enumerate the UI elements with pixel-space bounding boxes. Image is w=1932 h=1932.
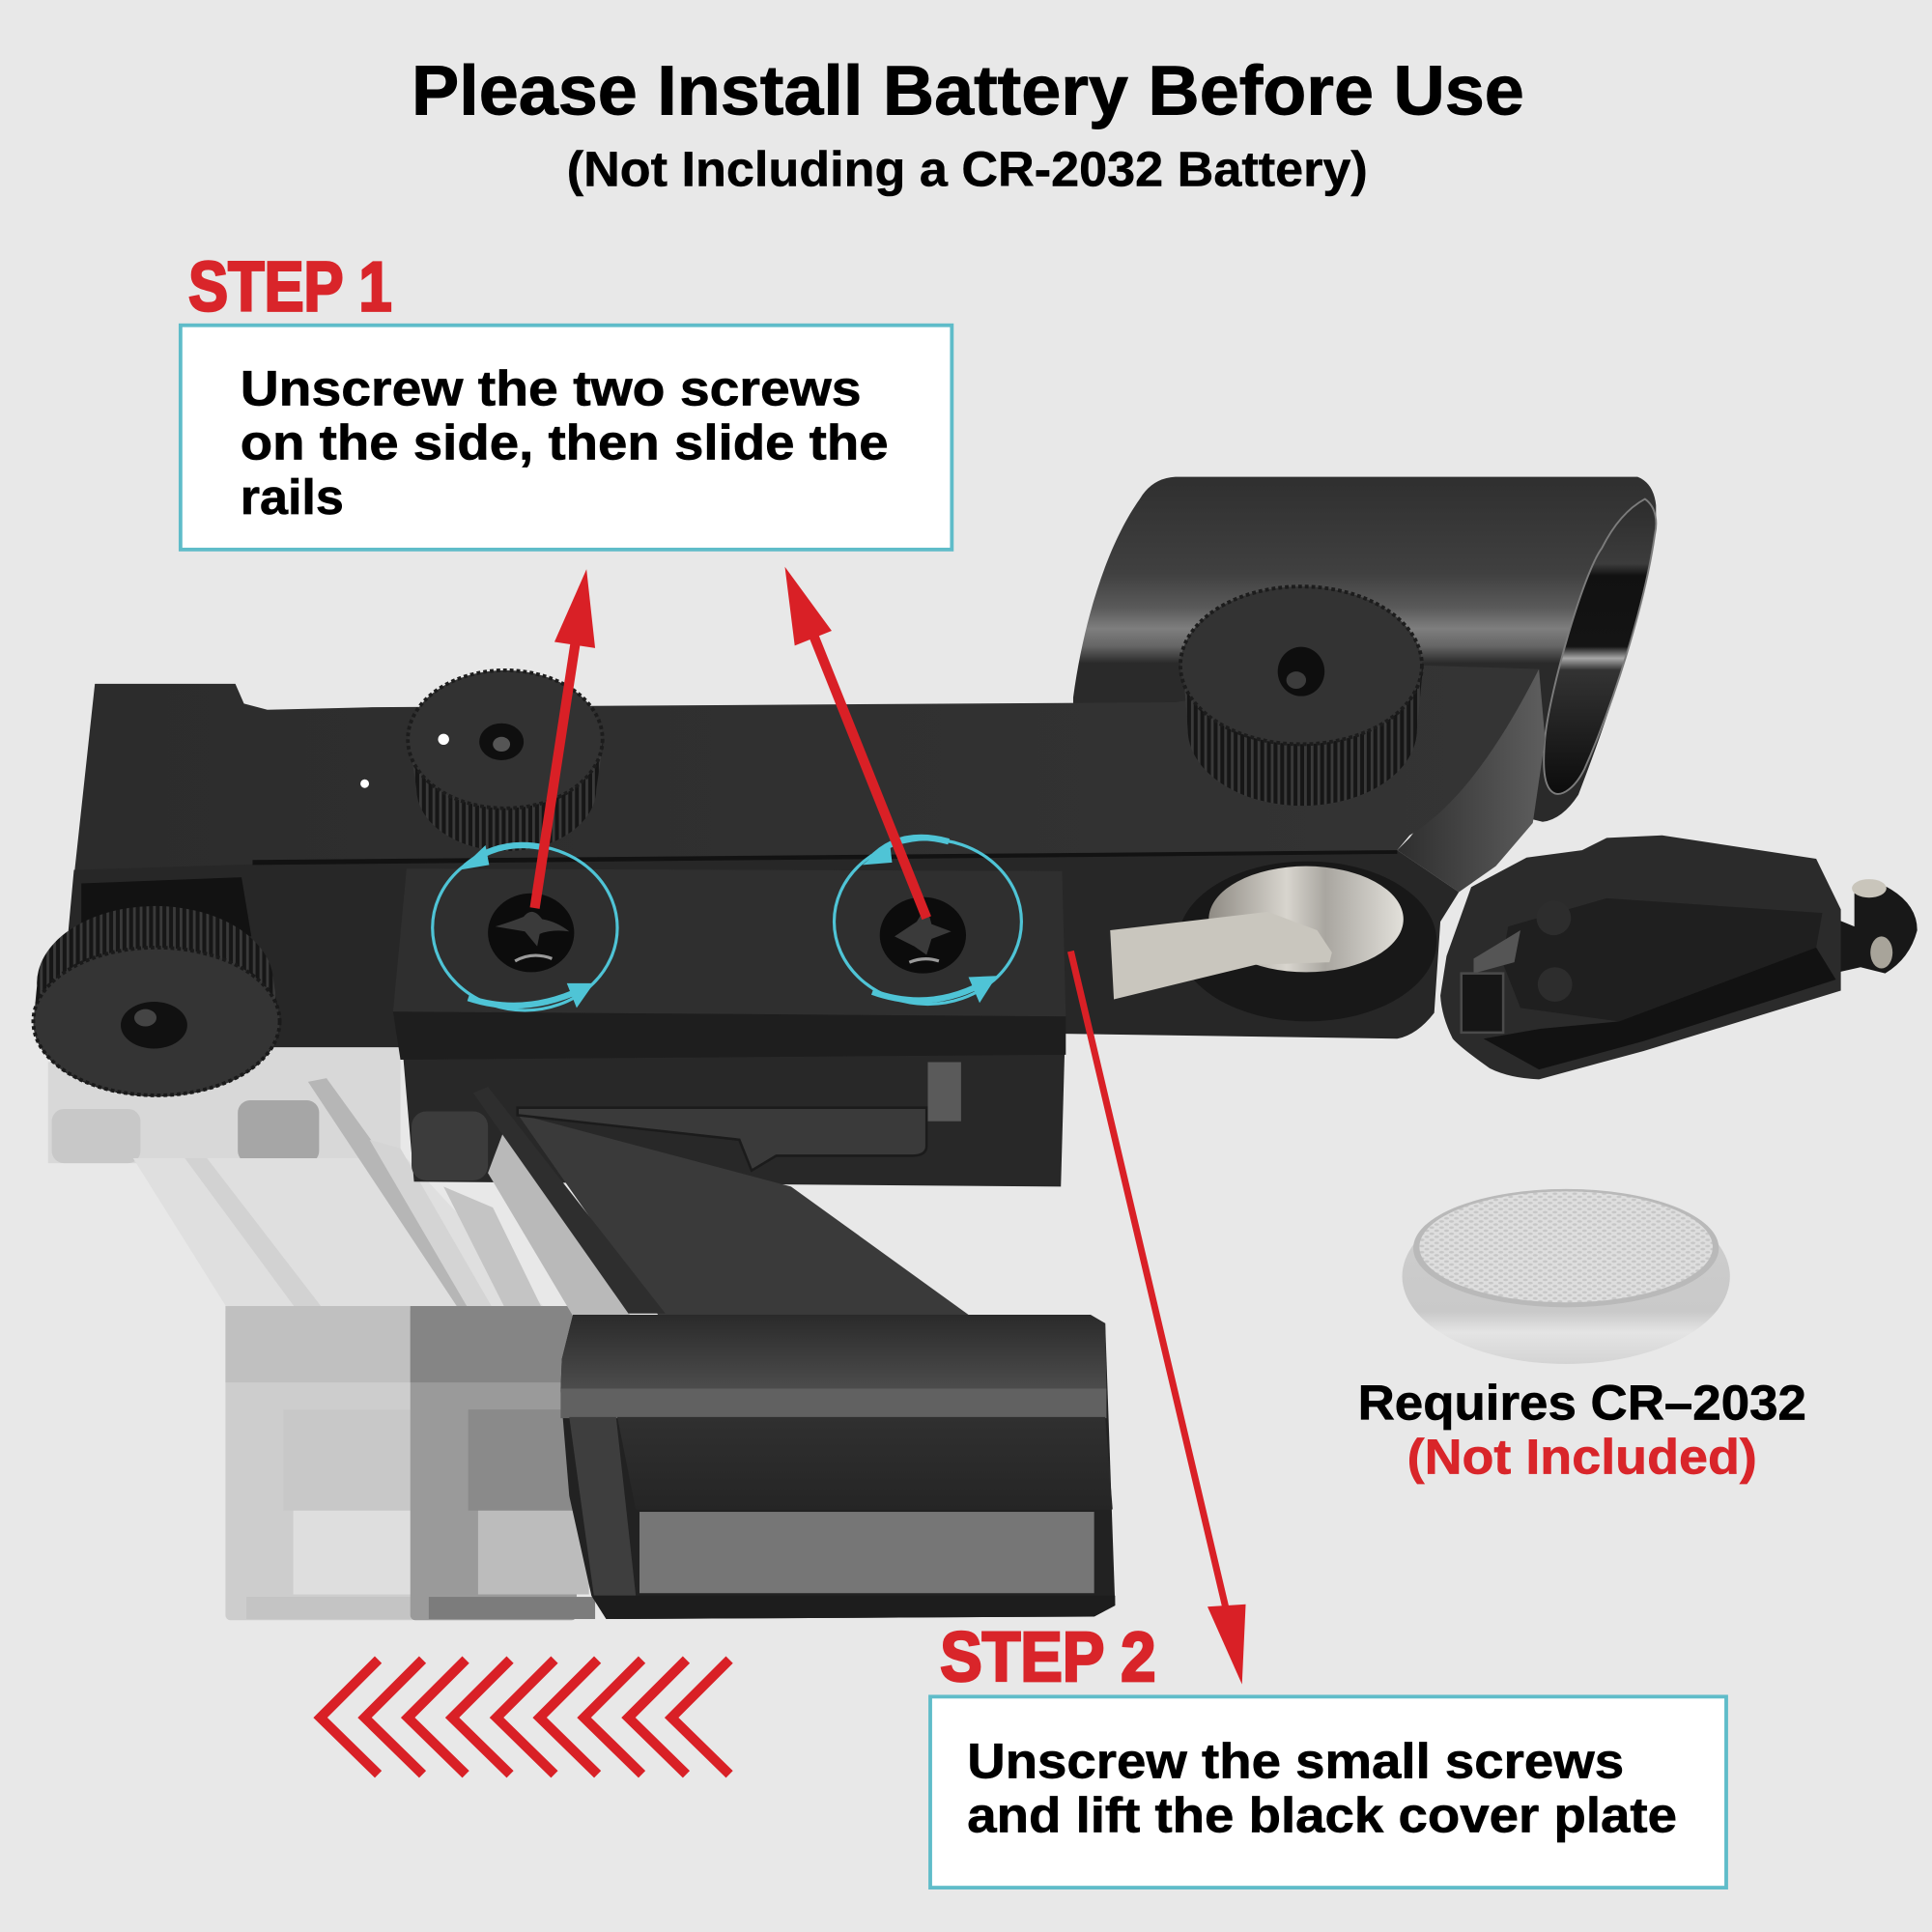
- front catch: [412, 1112, 488, 1180]
- panel: step 1 instructions: on the side, then slide the: [241, 415, 889, 470]
- white dot: [360, 780, 369, 788]
- battery cover lid: [1440, 836, 1841, 1079]
- slider block under plate: [403, 1054, 1065, 1186]
- small top knob: [408, 670, 604, 851]
- telescope finder device: [33, 477, 1918, 1619]
- large knob: [1180, 586, 1423, 806]
- rod: [473, 1087, 666, 1314]
- lower rail arm: [62, 850, 1459, 1047]
- slider rib: [518, 1108, 926, 1171]
- ring opening: [1544, 499, 1656, 794]
- icon: CR-2032 coin battery: [1403, 1189, 1730, 1364]
- subtitle: (Not Including a CR-2032 Battery): [567, 142, 1368, 197]
- panel: step 1 instructions: Unscrew the two screws: [241, 361, 862, 416]
- left knob: [33, 906, 280, 1096]
- mounting plate: [393, 868, 1065, 1060]
- metal clip: [1110, 912, 1332, 999]
- panel: step 2 instructions: and lift the black cover plate: [967, 1788, 1677, 1843]
- heading: step 2: STEP 2: [940, 1618, 1155, 1696]
- arrow: to step 2 box: [1070, 952, 1246, 1685]
- panel: step 1 instructions: [181, 326, 952, 550]
- diagonal stem: [518, 1114, 969, 1315]
- ghost images of sliding bracket: [48, 1033, 595, 1620]
- arrow: to step 1 box, left: [535, 569, 595, 908]
- not included label: (Not Included): [1407, 1430, 1757, 1485]
- heading: step 1: STEP 1: [188, 247, 392, 326]
- battery label: Requires CR–2032: [1358, 1375, 1806, 1430]
- ring clamp: [1073, 477, 1656, 822]
- title: Please Install Battery Before Use: [412, 52, 1524, 130]
- panel: step 2 instructions: [930, 1696, 1726, 1888]
- screw 2: [880, 897, 966, 974]
- lid latch screw: [1833, 879, 1918, 974]
- direction chevrons: [321, 1660, 729, 1775]
- mid ghost base: [411, 1306, 595, 1620]
- silver strip: [488, 1133, 631, 1316]
- rotation arrows: right screw: [835, 838, 1021, 1005]
- far ghost base: [225, 1306, 429, 1620]
- neck joining ring and body: [1397, 669, 1545, 892]
- panel: step 2 instructions: Unscrew the small screws: [967, 1734, 1624, 1789]
- upper rail: [74, 666, 1539, 877]
- rotation arrows: left screw: [433, 845, 617, 1010]
- panel: step 1 instructions: rails: [241, 469, 344, 525]
- dark line along the rail: [252, 850, 1397, 865]
- battery compartment: [1110, 862, 1436, 1021]
- screw 1: [488, 894, 574, 972]
- arrow: to step 1 box, right: [784, 567, 926, 918]
- base block: [560, 1315, 1115, 1619]
- battery contact disk: [1208, 867, 1404, 972]
- rail slot under left end: [81, 877, 251, 936]
- spring screw: [927, 1062, 961, 1122]
